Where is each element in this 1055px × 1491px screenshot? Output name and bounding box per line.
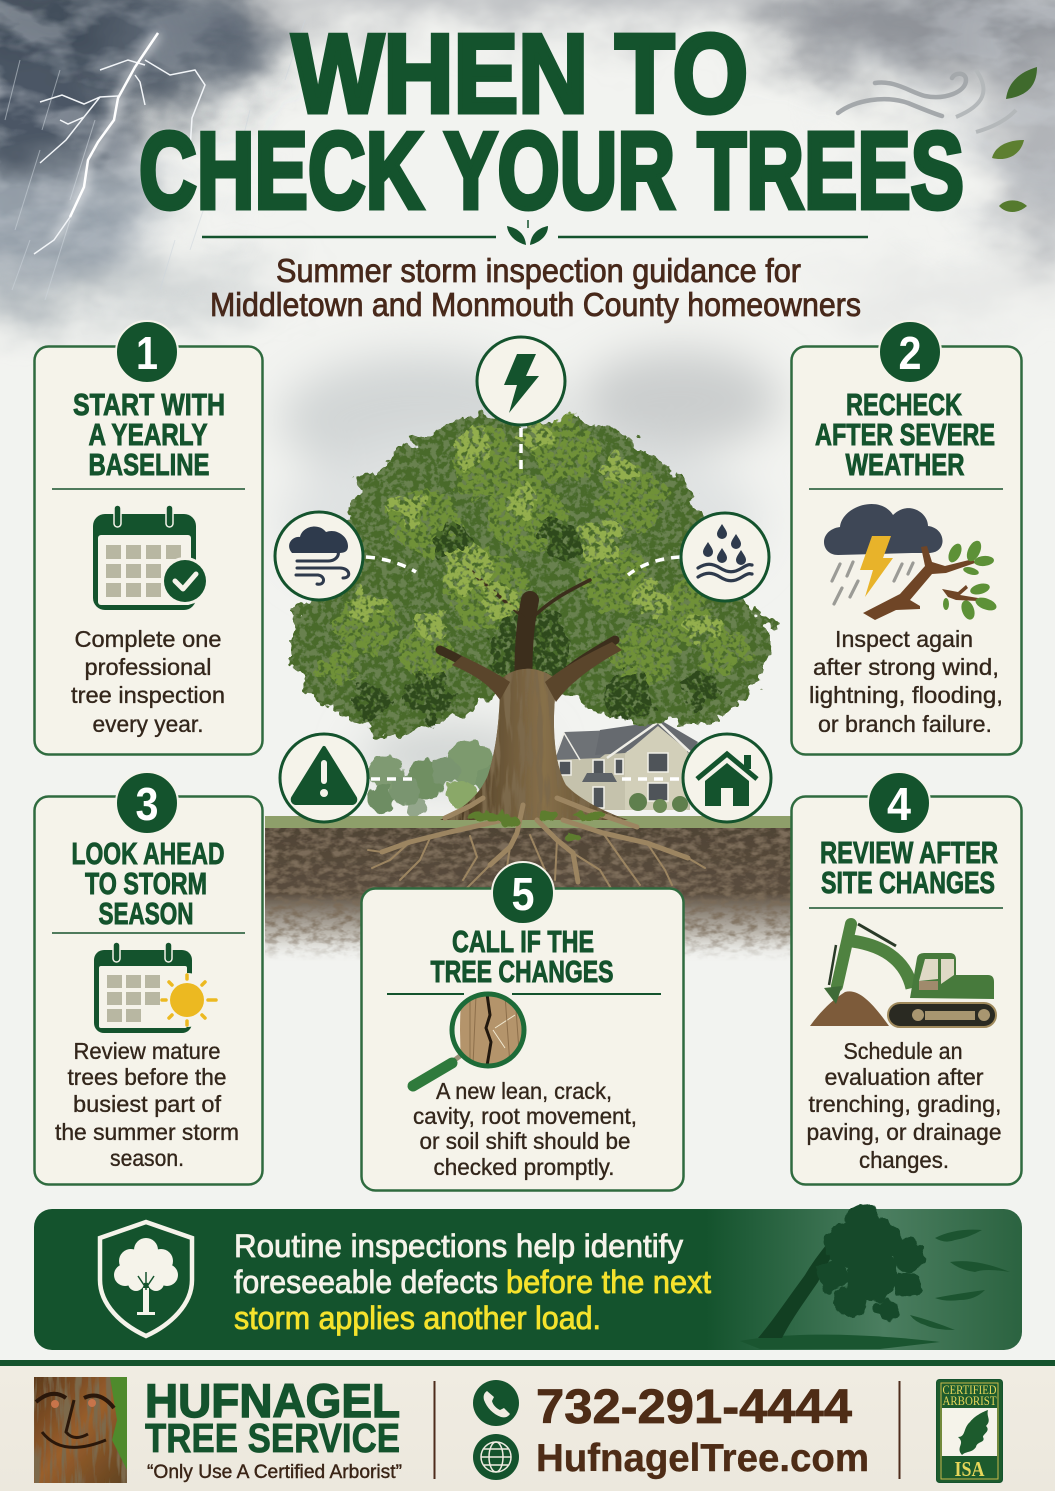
panel: step 5 tree changes	[362, 862, 684, 1190]
body text	[55, 1038, 239, 1171]
number badge 3	[116, 772, 178, 834]
panel: step 2 severe weather	[792, 321, 1022, 754]
heading: CALL IF THE	[452, 924, 594, 959]
number badge 4	[868, 772, 930, 834]
icon: house	[683, 734, 771, 822]
body text: Schedule an	[844, 1038, 962, 1064]
message text: storm applies another load.	[234, 1300, 601, 1336]
body text: every year.	[92, 711, 204, 737]
heading: AFTER SEVERE	[815, 417, 995, 452]
icon: shield with tree	[100, 1222, 192, 1336]
heading: WEATHER	[846, 447, 964, 482]
tree	[288, 414, 771, 890]
body text: season.	[110, 1145, 184, 1171]
company name	[145, 1374, 402, 1483]
ISA certified arborist badge: ARBORIST	[942, 1393, 997, 1408]
heading: SITE CHANGES	[821, 865, 995, 900]
ISA certified arborist badge	[936, 1380, 1002, 1482]
body text: evaluation after	[824, 1064, 984, 1090]
body text: or soil shift should be	[420, 1128, 630, 1154]
body text: Inspect again	[835, 626, 973, 652]
branches	[440, 570, 615, 690]
body text: tree inspection	[71, 682, 225, 708]
heading: START WITH	[73, 387, 225, 422]
body text: changes.	[859, 1147, 949, 1173]
body text: or branch failure.	[818, 711, 992, 737]
company name: “Only Use A Certified Arborist”	[147, 1462, 402, 1483]
divider with sprout	[202, 220, 868, 245]
ISA certified arborist badge: ISA	[954, 1457, 985, 1481]
heading: TO STORM	[85, 866, 207, 901]
trunk	[440, 669, 628, 820]
number badge 3: 3	[136, 778, 158, 830]
banner: key message	[34, 1203, 1022, 1350]
icon: phone	[473, 1380, 519, 1426]
soil with roots area	[265, 816, 791, 961]
body text	[71, 626, 225, 737]
icon: excavator	[810, 924, 996, 1027]
body text: cavity, root movement,	[413, 1103, 637, 1129]
heading	[430, 924, 614, 989]
body text	[809, 626, 1003, 737]
phone number: 732-291-4444	[536, 1381, 852, 1434]
body text: Complete one	[74, 626, 222, 652]
body text	[806, 1038, 1002, 1173]
body text: paving, or drainage	[806, 1119, 1002, 1145]
company name: HUFNAGEL	[145, 1374, 400, 1427]
body text: professional	[84, 654, 212, 680]
limbs	[452, 642, 622, 702]
stormy sky	[0, 0, 1055, 320]
body text: busiest part of	[73, 1091, 222, 1117]
number badge 5	[492, 862, 554, 924]
ISA certified arborist badge: CERTIFIED	[942, 1382, 996, 1397]
title	[139, 12, 964, 232]
heading: SEASON	[98, 896, 194, 931]
panel: step 4 site changes	[792, 772, 1022, 1184]
message text	[234, 1228, 711, 1336]
icon: lightning bolt	[477, 337, 565, 425]
heading	[73, 387, 225, 482]
number badge 2	[879, 321, 941, 383]
icon: calendar with sun	[94, 942, 216, 1033]
wind swirls and blowing leaves	[838, 67, 1037, 212]
lightning and rain	[5, 20, 305, 300]
body text: lightning, flooding,	[809, 682, 1003, 708]
number badge 1: 1	[136, 327, 158, 379]
house	[553, 721, 698, 813]
company name: TREE SERVICE	[145, 1415, 400, 1461]
heading: A YEARLY	[88, 417, 208, 452]
subtitle: Middletown and Monmouth County homeowners	[210, 286, 861, 323]
message text: before the next	[506, 1264, 711, 1300]
message text: foreseeable defects	[234, 1264, 498, 1300]
roots	[368, 798, 705, 890]
canopy shadows	[352, 520, 718, 719]
leaf highlights	[349, 420, 721, 641]
icon: warning triangle	[280, 734, 368, 822]
number badge 4: 4	[887, 778, 911, 830]
title: WHEN TO	[292, 12, 748, 136]
panel: step 1 yearly baseline	[34, 321, 262, 754]
heading: LOOK AHEAD	[72, 836, 224, 871]
icon: wind and cloud	[275, 512, 363, 600]
central scene background clouds	[280, 350, 780, 785]
body text: checked promptly.	[434, 1154, 614, 1180]
windblown tree silhouette	[740, 1203, 1010, 1349]
number badge 2: 2	[898, 327, 922, 379]
icon: calendar check	[93, 505, 209, 610]
message text: Routine inspections help identify	[234, 1228, 683, 1264]
body text: trenching, grading,	[808, 1091, 1002, 1117]
panel: step 3 storm season	[34, 772, 262, 1184]
heading	[815, 387, 995, 482]
body text: trees before the	[68, 1064, 226, 1090]
heading: REVIEW AFTER	[820, 835, 998, 870]
heading: RECHECK	[846, 387, 962, 422]
heading: BASELINE	[88, 447, 210, 482]
heading: TREE CHANGES	[430, 954, 614, 989]
website: HufnagelTree.com	[536, 1437, 869, 1480]
icon: magnifier over cracked wood	[413, 990, 530, 1086]
body text: the summer storm	[55, 1119, 239, 1145]
subtitle	[210, 252, 861, 323]
heading	[820, 835, 998, 900]
background trees	[368, 740, 504, 816]
body text: after strong wind,	[813, 654, 999, 680]
number badge 1	[116, 321, 178, 383]
heading	[72, 836, 224, 931]
icon: globe	[473, 1434, 519, 1480]
subtitle: Summer storm inspection guidance for	[276, 252, 801, 289]
body text: Review mature	[74, 1038, 220, 1064]
body text	[413, 1078, 637, 1180]
footer	[0, 1360, 1055, 1491]
canopy	[288, 414, 771, 736]
portrait logo	[34, 1377, 127, 1483]
icon: storm cloud and broken branch	[824, 504, 998, 621]
dashed connectors	[366, 428, 680, 779]
number badge 5: 5	[512, 868, 534, 920]
moss	[468, 810, 608, 843]
icon: rain and flood water	[681, 513, 769, 601]
body text: A new lean, crack,	[436, 1078, 612, 1104]
